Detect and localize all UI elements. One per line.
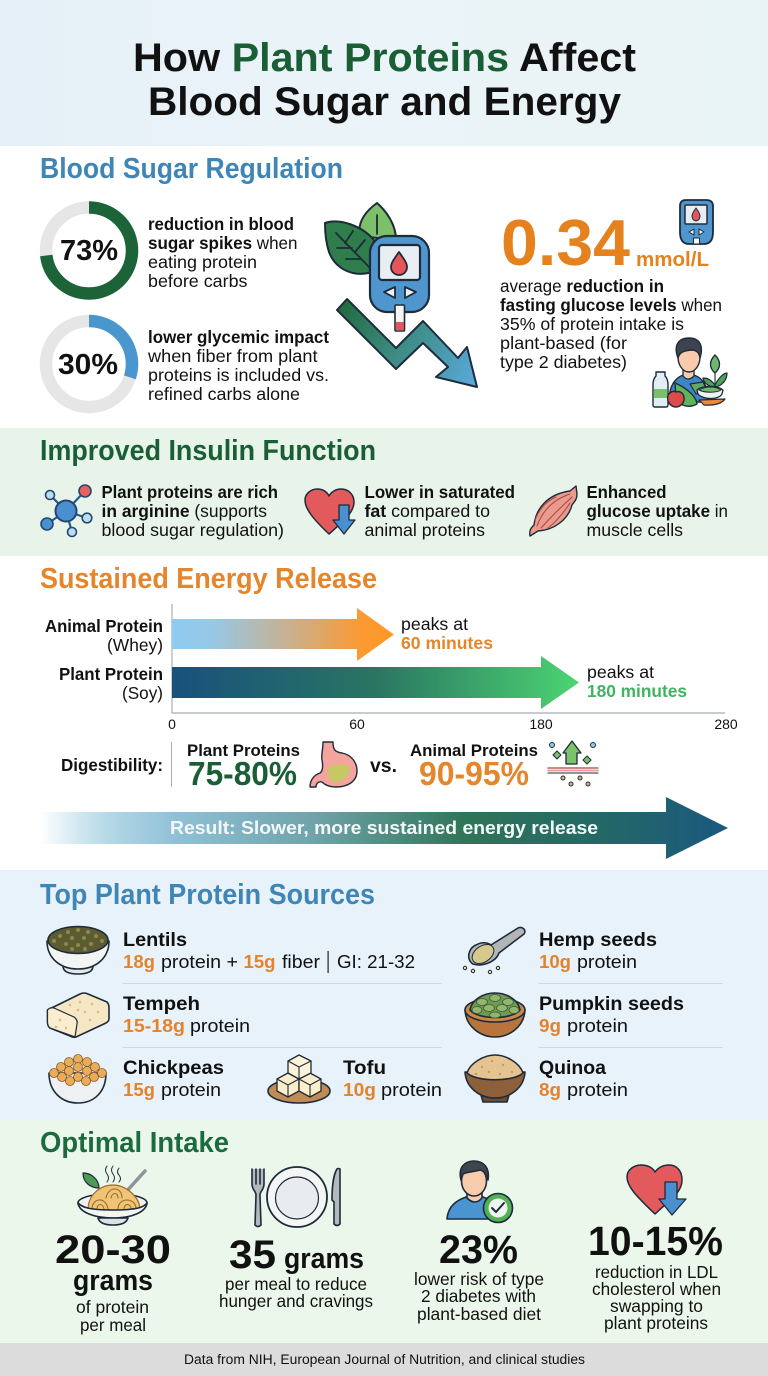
stat: 35 grams: 35 bbox=[229, 1233, 276, 1277]
label: peaks at 180 minutes: peaks at bbox=[587, 662, 654, 682]
text: quinoa: 8g bbox=[539, 1079, 561, 1100]
label: animal protein bbox=[45, 616, 163, 655]
icon: heart with down arrow bbox=[627, 1165, 686, 1215]
icon: heart with down arrow bbox=[305, 489, 355, 534]
icon: pumpkin seeds bowl bbox=[465, 993, 525, 1037]
text: tofu: protein bbox=[381, 1079, 442, 1100]
icon: hemp seeds spoon bbox=[463, 927, 525, 974]
text: fasting glucose: 35% of protein intake is bbox=[500, 314, 684, 334]
label: peaks at 60 minutes bbox=[401, 614, 493, 653]
text: glucose uptake bbox=[586, 482, 728, 540]
icon: bowl of noodles bbox=[78, 1166, 147, 1225]
stat: 20-30 grams: 20-30 bbox=[55, 1228, 171, 1272]
stat: plant proteins 75-80%: Plant Proteins bbox=[187, 741, 300, 760]
text: pumpkin seeds bbox=[539, 993, 684, 1036]
stat: animal proteins 90-95%: 90-95% bbox=[419, 755, 529, 792]
text: hemp seeds bbox=[539, 929, 657, 972]
stat: 35 grams bbox=[219, 1233, 373, 1311]
arrow: plant protein bbox=[172, 656, 579, 709]
digestibility comparison bbox=[61, 741, 598, 792]
icon: tofu on board bbox=[268, 1055, 330, 1103]
label: plant protein: (Soy) bbox=[122, 683, 163, 703]
text: saturated fat: Lower in saturated bbox=[364, 482, 515, 502]
title: How Plant Proteins Affect bbox=[133, 36, 636, 80]
donut chart: 73%: 73% bbox=[60, 235, 118, 267]
icon: person with vegetables bbox=[653, 338, 727, 407]
text: lentils: Lentils bbox=[123, 929, 187, 951]
chart: energy release timeline bbox=[45, 604, 738, 732]
arrow: result banner: Result: Slower, more sustained energy release bbox=[170, 817, 598, 838]
donut chart: 73% bbox=[46, 208, 132, 294]
text: lentils: 18g bbox=[123, 951, 155, 972]
text: glycemic impact: proteins is included vs. bbox=[148, 365, 329, 385]
icon: glucose meter with leaves and falling arrow bbox=[325, 203, 477, 387]
text: tofu bbox=[343, 1057, 442, 1100]
stat: 23% bbox=[414, 1228, 544, 1324]
text: lentils bbox=[123, 929, 415, 973]
stat: animal proteins 90-95% bbox=[410, 741, 538, 792]
stat: 20-30 grams: grams bbox=[73, 1265, 153, 1297]
stat: 0.34 mmol/L: mmol/L bbox=[636, 248, 709, 271]
stat: 23%: plant-based diet bbox=[417, 1304, 541, 1324]
axis labels: 0 bbox=[168, 716, 176, 732]
text: arginine bbox=[102, 482, 284, 540]
text: lentils: GI: 21-32 bbox=[337, 951, 415, 972]
donut chart: 30%: 30% bbox=[58, 349, 118, 381]
text: tempeh: 15-18g bbox=[123, 1015, 185, 1036]
text: glucose uptake: muscle cells bbox=[586, 520, 683, 540]
stat: 20-30 grams: per meal bbox=[80, 1315, 146, 1335]
stat: 10-15%: swapping to bbox=[610, 1296, 703, 1316]
label: plant protein: Plant Protein bbox=[59, 664, 163, 684]
text: pumpkin seeds: Pumpkin seeds bbox=[539, 993, 684, 1015]
icon: chickpeas bowl bbox=[49, 1054, 106, 1103]
label: vs: vs. bbox=[370, 756, 397, 777]
text: saturated fat: fat compared to bbox=[364, 501, 490, 521]
heading: optimal intake: Optimal Intake bbox=[40, 1127, 229, 1159]
text: glycemic impact: refined carbs alone bbox=[148, 384, 300, 404]
text: hemp seeds: 10g bbox=[539, 951, 571, 972]
text: blood sugar spikes: sugar spikes when bbox=[148, 233, 298, 253]
heading: sustained energy release: Sustained Energy Release bbox=[40, 563, 377, 595]
text: lentils: protein + bbox=[161, 951, 238, 972]
text: glucose uptake: Enhanced bbox=[586, 482, 666, 502]
axis labels: 180 bbox=[529, 716, 553, 732]
heading: improved insulin function: Improved Insulin Function bbox=[40, 435, 376, 467]
stat: 35 grams: grams bbox=[284, 1243, 364, 1275]
text: arginine: in arginine (supports bbox=[102, 501, 267, 521]
donut chart: 30% bbox=[46, 321, 132, 407]
stat: 10-15%: cholesterol when bbox=[592, 1279, 721, 1299]
axis labels bbox=[168, 716, 738, 732]
text: chickpeas: 15g bbox=[123, 1079, 155, 1100]
text: tempeh bbox=[123, 993, 250, 1036]
stat: 35 grams: per meal to reduce bbox=[225, 1274, 367, 1294]
stat: 10-15%: plant proteins bbox=[604, 1313, 708, 1333]
text: glucose uptake: glucose uptake in bbox=[586, 501, 728, 521]
text: quinoa bbox=[539, 1057, 628, 1100]
text: arginine: Plant proteins are rich bbox=[102, 482, 278, 502]
stat: 23%: lower risk of type bbox=[414, 1269, 544, 1289]
text: glycemic impact: when fiber from plant bbox=[147, 346, 318, 366]
stat: animal proteins 90-95%: Animal Proteins bbox=[410, 741, 538, 760]
text: hemp seeds: Hemp seeds bbox=[539, 929, 657, 951]
label: peaks at 180 minutes: 180 minutes bbox=[587, 681, 687, 701]
icon: absorption bbox=[548, 741, 598, 786]
stat: 10-15%: reduction in LDL bbox=[595, 1262, 718, 1282]
footer bbox=[0, 1343, 768, 1376]
text: saturated fat bbox=[364, 482, 515, 540]
stat: 23%: 2 diabetes with bbox=[421, 1286, 536, 1306]
icon: tempeh bbox=[48, 993, 109, 1037]
stat: 23%: 23% bbox=[439, 1228, 518, 1272]
icon: molecule bbox=[41, 485, 92, 536]
icon: stomach bbox=[310, 742, 357, 787]
heading: blood sugar regulation: Blood Sugar Regulation bbox=[40, 153, 343, 185]
stat: 20-30 grams: of protein bbox=[76, 1297, 149, 1317]
panel: optimal intake bbox=[40, 1127, 723, 1335]
stat: 10-15% bbox=[588, 1218, 723, 1333]
stat: 10-15%: 10-15% bbox=[588, 1218, 723, 1264]
text: chickpeas: Chickpeas bbox=[123, 1057, 224, 1079]
text: fasting glucose bbox=[500, 276, 722, 372]
stat: 0.34 mmol/L bbox=[501, 206, 709, 279]
footer: Data from NIH, European Journal of Nutrition, and clinical studies bbox=[184, 1352, 585, 1367]
icon: person with check mark bbox=[447, 1161, 512, 1222]
panel: improved insulin function bbox=[40, 435, 728, 540]
text: fasting glucose: average reduction in bbox=[500, 276, 664, 296]
text: fasting glucose: type 2 diabetes) bbox=[500, 352, 627, 372]
text: quinoa: Quinoa bbox=[539, 1057, 606, 1079]
text: pumpkin seeds: protein bbox=[567, 1015, 628, 1036]
text: glycemic impact bbox=[147, 327, 329, 404]
text: blood sugar spikes: eating protein bbox=[148, 252, 257, 272]
text: tempeh: Tempeh bbox=[123, 993, 200, 1015]
text: tempeh: protein bbox=[190, 1015, 250, 1036]
stat: 35 grams: hunger and cravings bbox=[219, 1291, 373, 1311]
icon: plate and cutlery bbox=[252, 1167, 340, 1227]
text: saturated fat: animal proteins bbox=[364, 520, 485, 540]
text: quinoa: protein bbox=[567, 1079, 628, 1100]
text: chickpeas bbox=[123, 1057, 224, 1100]
text: fasting glucose: fasting glucose levels when bbox=[500, 295, 722, 315]
label: peaks at 60 minutes: peaks at bbox=[401, 614, 468, 634]
icon: quinoa bowl bbox=[465, 1055, 525, 1102]
icon: lentils bowl bbox=[47, 926, 109, 974]
stat: plant proteins 75-80%: 75-80% bbox=[188, 755, 297, 792]
stat: 0.34 mmol/L: 0.34 bbox=[501, 206, 630, 279]
text: tofu: Tofu bbox=[343, 1057, 386, 1079]
text: pumpkin seeds: 9g bbox=[539, 1015, 561, 1036]
stat: 20-30 grams bbox=[55, 1228, 171, 1335]
title: Blood Sugar and Energy bbox=[148, 80, 621, 124]
arrow: result banner bbox=[40, 797, 728, 859]
text: lentils: 15g bbox=[244, 951, 276, 972]
icon: small glucose meter bbox=[680, 200, 713, 244]
axis labels: 60 bbox=[349, 716, 365, 732]
label: animal protein: Animal Protein bbox=[45, 616, 163, 636]
text: lentils: fiber bbox=[282, 951, 320, 972]
label: peaks at 180 minutes bbox=[587, 662, 687, 701]
label: peaks at 60 minutes: 60 minutes bbox=[401, 633, 493, 653]
panel: blood sugar regulation bbox=[40, 153, 727, 407]
arrow: animal protein bbox=[172, 608, 394, 661]
axis labels: 280 bbox=[714, 716, 738, 732]
text: hemp seeds: protein bbox=[577, 951, 637, 972]
text: blood sugar spikes: before carbs bbox=[148, 271, 248, 291]
text: tofu: 10g bbox=[343, 1079, 376, 1100]
heading: top plant protein sources: Top Plant Protein Sources bbox=[40, 879, 375, 911]
label: animal protein: (Whey) bbox=[107, 635, 163, 655]
text: chickpeas: protein bbox=[161, 1079, 221, 1100]
text: blood sugar spikes bbox=[148, 214, 298, 291]
text: arginine: blood sugar regulation) bbox=[102, 520, 284, 540]
label: plant protein bbox=[59, 664, 163, 703]
text: fasting glucose: plant-based (for bbox=[500, 333, 627, 353]
panel: sustained energy release bbox=[40, 563, 738, 859]
title bbox=[133, 36, 636, 124]
icon: muscle bbox=[530, 486, 577, 536]
panel: top plant protein sources bbox=[40, 879, 723, 1103]
text: glycemic impact: lower glycemic impact bbox=[148, 327, 329, 347]
text: blood sugar spikes: reduction in blood bbox=[148, 214, 294, 234]
digestibility comparison: Digestibility: bbox=[61, 755, 163, 775]
